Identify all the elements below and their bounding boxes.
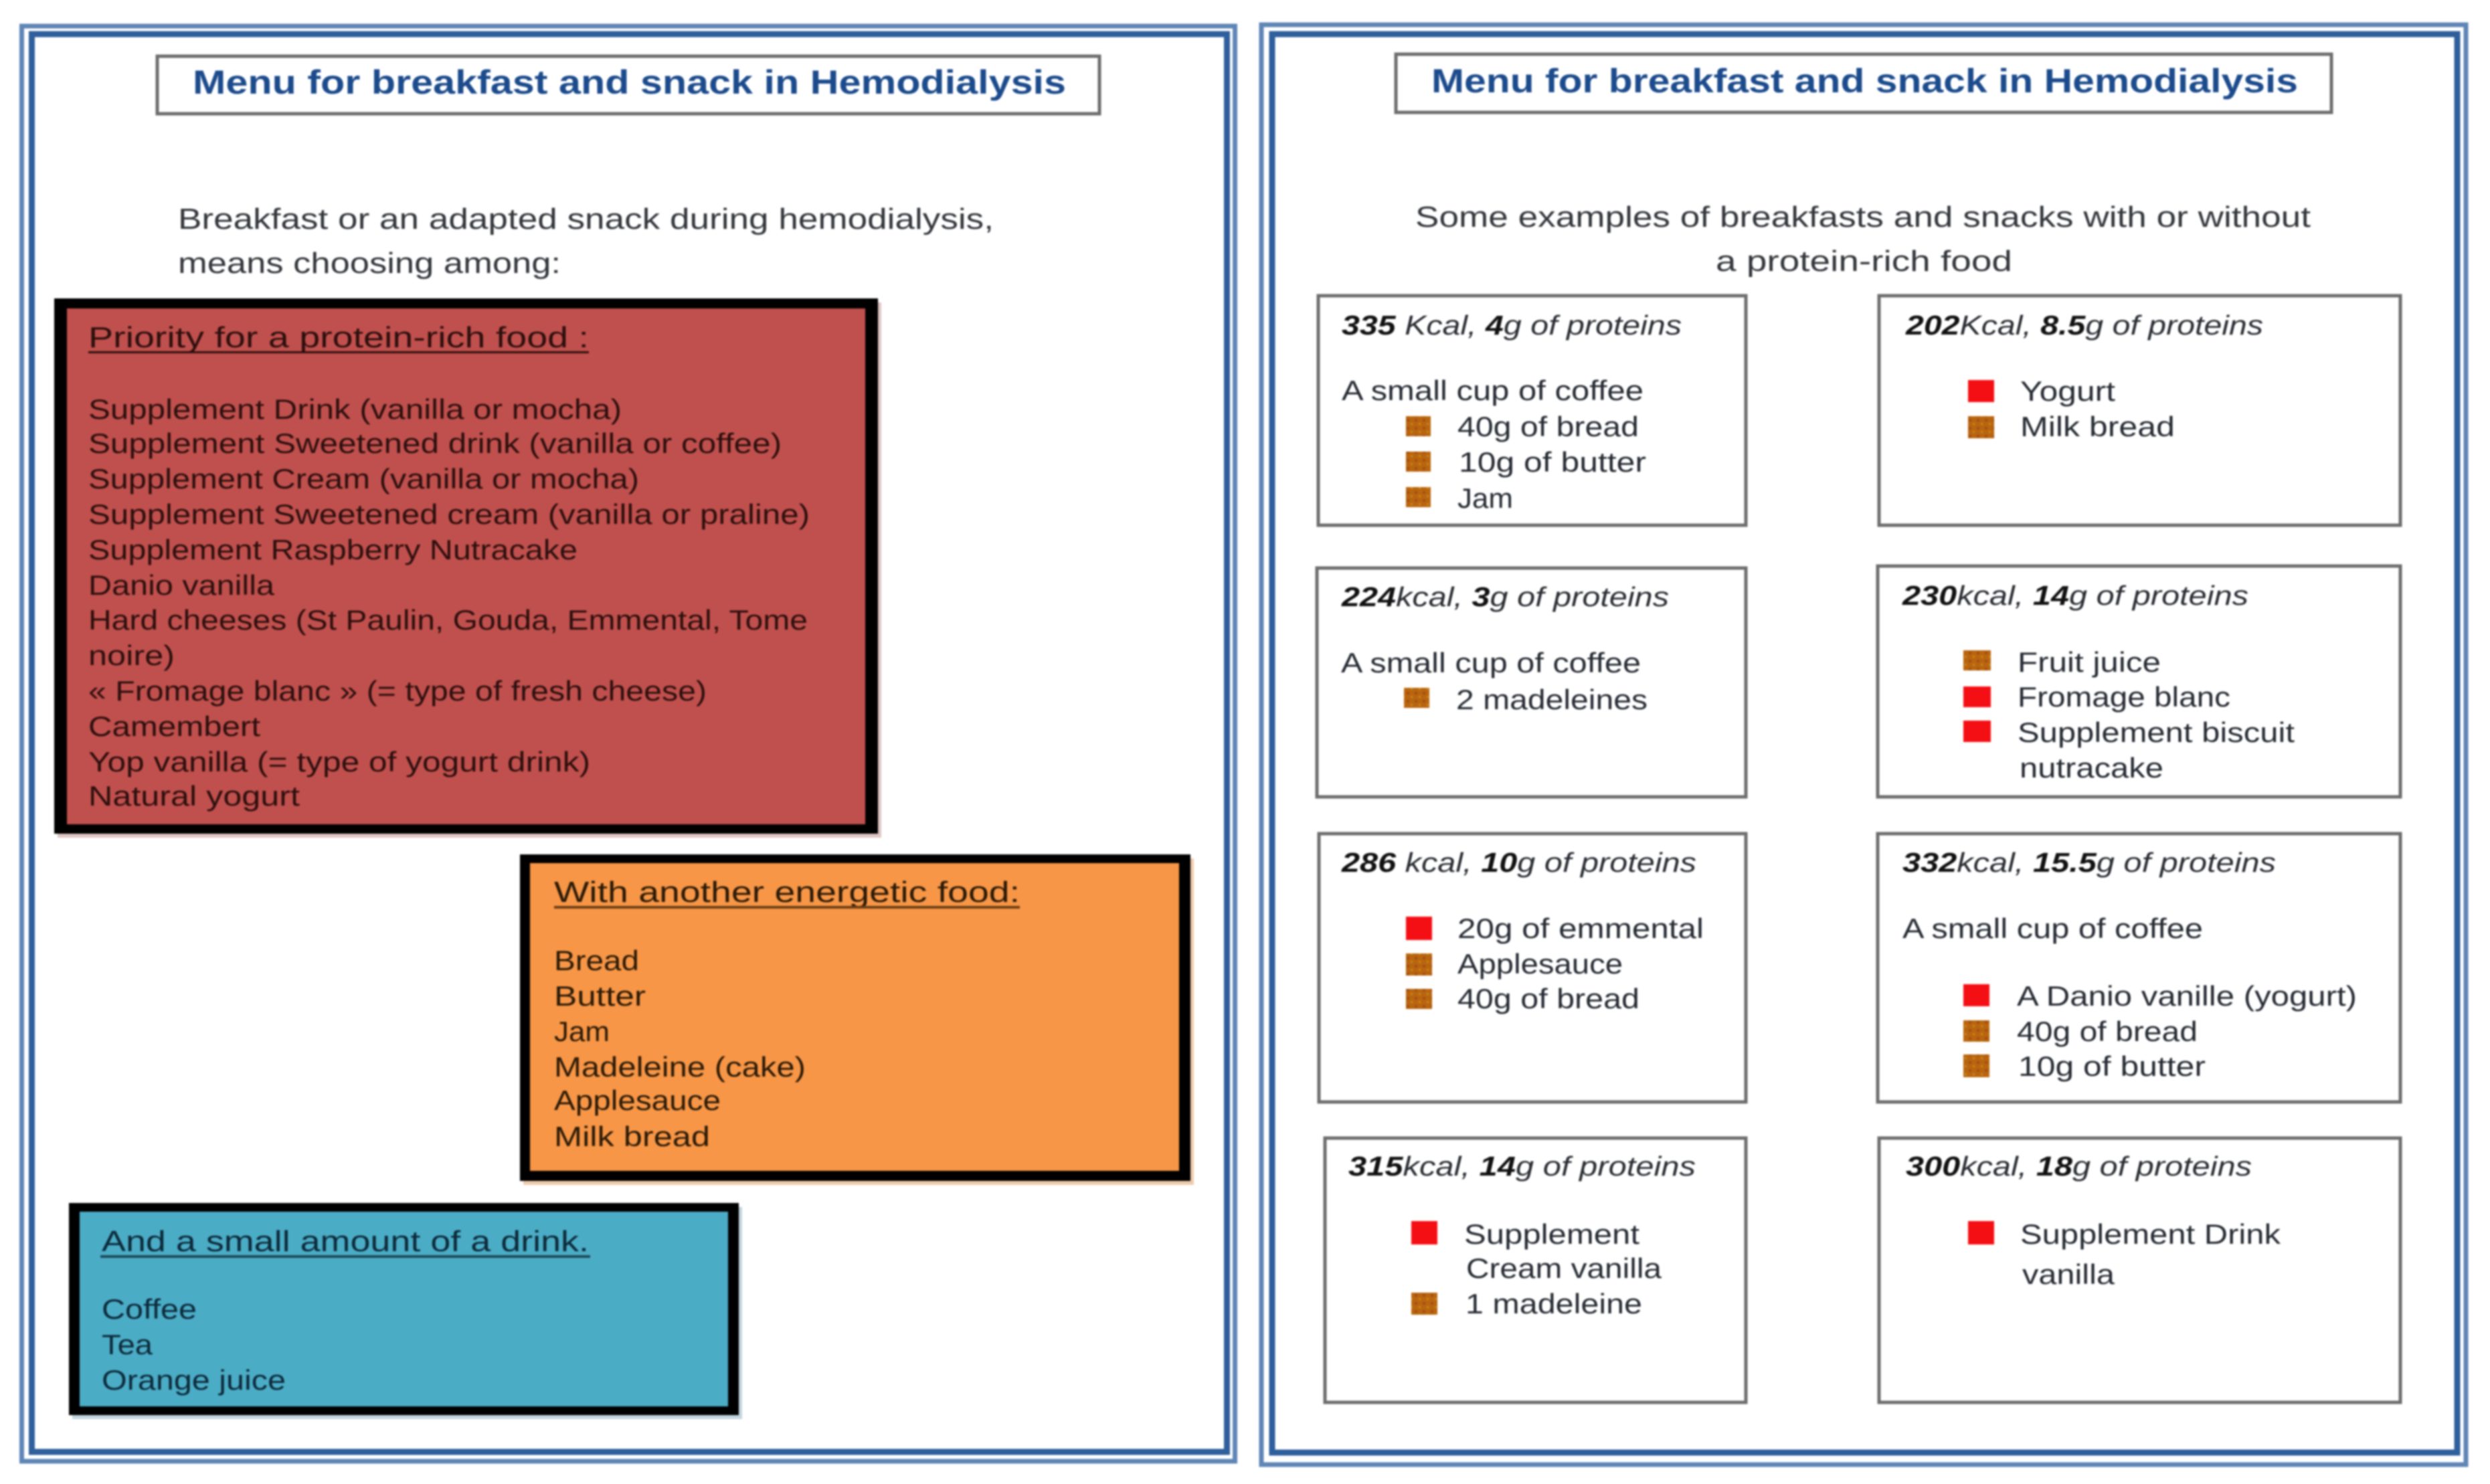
card: 202 Kcal: 202 Kcal, 8.5g of proteins	[1905, 310, 2263, 341]
item: supplement cream vanilla: Cream vanilla	[1466, 1253, 1662, 1284]
item: yogurt: Yogurt	[2020, 375, 2115, 407]
intro text: examples: a protein-rich food	[1716, 245, 2012, 278]
protein food list: Supplement Sweetened cream (vanilla or praline)	[88, 498, 810, 530]
protein food list: Hard cheeses (St Paulin, Gouda, Emmental, Tome	[88, 604, 808, 636]
card: 286 kcal: 286 kcal, 10g of proteins	[1341, 847, 1696, 878]
intro text: examples: Some examples of breakfasts and snacks with or without	[1415, 201, 2311, 234]
drink list: Coffee	[102, 1293, 197, 1325]
item: applesauce	[1406, 948, 1623, 980]
card: 300 kcal: 300 kcal, 18g of proteins	[1906, 1151, 2252, 1182]
heading: drink: And a small amount of a drink.	[102, 1225, 589, 1258]
intro text: Breakfast or an adapted snack during hemodialysis,	[178, 203, 994, 236]
left title box: Menu for breakfast and snack in Hemodialysis	[193, 64, 1066, 101]
energetic food list: Milk bread	[554, 1121, 710, 1152]
card: 332 kcal	[1878, 834, 2400, 1102]
card: 335 Kcal: 335 Kcal, 4g of proteins	[1342, 310, 1682, 341]
item: 10g of butter: 10g of butter	[2018, 1050, 2206, 1082]
item: supplement biscuit nutracake: nutracake	[2020, 752, 2163, 783]
card: 335 Kcal	[1318, 296, 1746, 525]
energetic food list: Jam	[554, 1016, 610, 1047]
item: Danio vanille: A Danio vanille (yogurt)	[2017, 980, 2357, 1012]
protein food list: noire)	[88, 640, 175, 671]
item: fromage blanc: Fromage blanc	[2018, 681, 2230, 713]
item: 2 madeleines: 2 madeleines	[1456, 684, 1648, 715]
protein food list: Supplement Drink (vanilla or mocha)	[88, 393, 622, 425]
item: supplement biscuit nutracake	[1963, 717, 2295, 783]
energetic food list: Applesauce	[554, 1085, 721, 1116]
protein food list: Supplement Raspberry Nutracake	[88, 534, 577, 565]
energetic food list: Bread	[554, 945, 639, 976]
card: 224 kcal: 224 kcal, 3g of proteins	[1341, 581, 1669, 612]
item: jam	[1406, 482, 1513, 514]
item: supplement drink vanilla	[1968, 1218, 2281, 1290]
protein food list: Supplement Cream (vanilla or mocha)	[88, 463, 639, 494]
intro text: examples	[1415, 201, 2311, 278]
panel: energetic food	[520, 854, 1194, 1185]
item: supplement drink vanilla: Supplement Drink	[2020, 1218, 2281, 1250]
item: 40g of bread	[1406, 411, 1639, 442]
item: supplement cream vanilla	[1411, 1218, 1662, 1284]
panel: right page	[1261, 25, 2466, 1465]
card: 300 kcal	[1879, 1138, 2400, 1402]
card: 332 kcal: A small cup of coffee	[1902, 913, 2203, 944]
card: 335 Kcal: A small cup of coffee	[1342, 375, 1643, 406]
energetic food list	[554, 945, 806, 1152]
heading: protein priority: Priority for a protein-rich food :	[88, 321, 589, 354]
drink list	[102, 1293, 286, 1396]
item: milk bread	[1968, 411, 2175, 442]
item: 10g of butter: 10g of butter	[1459, 446, 1646, 478]
heading: energetic food: With another energetic food:	[554, 876, 1020, 909]
item: 10g of butter	[1406, 446, 1646, 478]
card: 286 kcal	[1319, 834, 1746, 1102]
right title box: Menu for breakfast and snack in Hemodialysis	[1431, 62, 2298, 100]
card: 332 kcal: 332 kcal, 15.5 g of proteins	[1902, 847, 2276, 878]
item: supplement cream vanilla: Supplement	[1464, 1218, 1639, 1250]
intro text: means choosing among:	[178, 247, 561, 280]
card: 315 kcal: 315 kcal, 14g of proteins	[1348, 1151, 1696, 1182]
drink list: Tea	[102, 1329, 153, 1360]
item: 40g of bread: 40g of bread	[1457, 983, 1639, 1014]
item: 40g of bread: 40g of bread	[2017, 1016, 2198, 1047]
left title box	[157, 56, 1099, 114]
energetic food list: Butter	[554, 980, 646, 1012]
protein food list	[88, 393, 810, 812]
protein food list: Supplement Sweetened drink (vanilla or coffee)	[88, 428, 782, 459]
item: yogurt	[1968, 375, 2115, 407]
right title box	[1396, 54, 2331, 112]
item: 40g of bread	[1406, 983, 1639, 1014]
right page double frame	[1261, 25, 2466, 1465]
protein food list: « Fromage blanc » (= type of fresh cheese)	[88, 675, 707, 707]
protein food list: Camembert	[88, 711, 260, 742]
protein food list: Danio vanilla	[88, 569, 275, 601]
item: fruit juice: Fruit juice	[2018, 646, 2161, 678]
card: 224 kcal: A small cup of coffee	[1341, 647, 1641, 678]
item: 2 madeleines	[1404, 684, 1648, 715]
intro text	[178, 203, 994, 280]
item: 1 madeleine: 1 madeleine	[1465, 1288, 1642, 1319]
item: 20g of emmental: 20g of emmental	[1457, 913, 1704, 944]
card: 315 kcal	[1325, 1138, 1746, 1402]
item: 40g of bread: 40g of bread	[1457, 411, 1639, 442]
energetic food list: Madeleine (cake)	[554, 1051, 806, 1083]
item: 40g of bread	[1963, 1016, 2198, 1047]
card: 230 kcal: 230 kcal, 14g of proteins	[1902, 580, 2248, 611]
item: fruit juice	[1963, 646, 2161, 678]
card: 230 kcal	[1878, 566, 2400, 797]
item: milk bread: Milk bread	[2020, 411, 2175, 442]
item: 1 madeleine	[1411, 1288, 1642, 1319]
protein food list: Yop vanilla (= type of yogurt drink)	[88, 746, 590, 777]
panel: drink	[69, 1203, 742, 1419]
item: applesauce: Applesauce	[1457, 948, 1623, 980]
card: 224 kcal	[1317, 568, 1746, 797]
card: 202 Kcal	[1879, 296, 2400, 525]
protein food list: Natural yogurt	[88, 780, 300, 812]
item: supplement drink vanilla: vanilla	[2022, 1259, 2115, 1290]
item: 10g of butter	[1963, 1050, 2206, 1082]
item: supplement biscuit nutracake: Supplement biscuit	[2018, 717, 2295, 748]
left page double frame	[21, 26, 1235, 1461]
panel: protein-rich food	[54, 298, 881, 838]
panel: left page	[21, 26, 1235, 1461]
drink list: Orange juice	[102, 1364, 286, 1396]
item: jam: Jam	[1457, 482, 1513, 514]
